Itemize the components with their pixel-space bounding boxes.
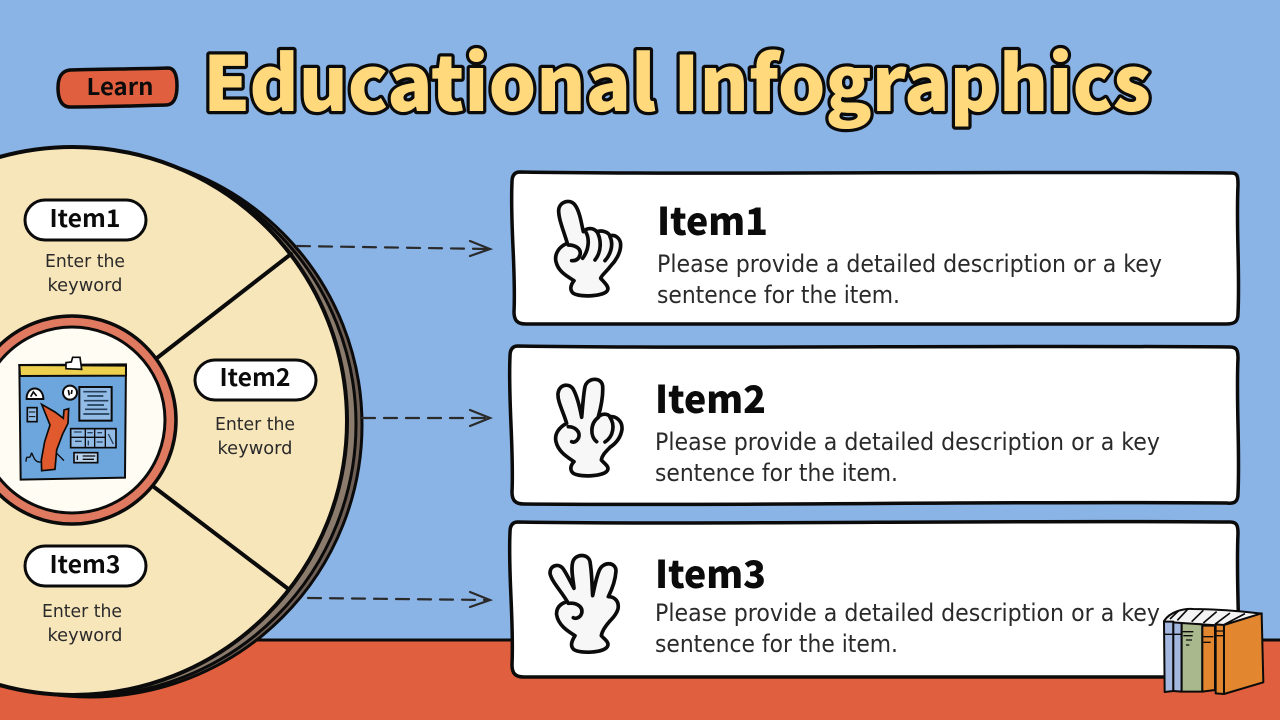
icon: books [1164, 609, 1263, 694]
item 2 description [655, 428, 1160, 487]
title: Educational Infographics [203, 23, 1151, 133]
item 2 description: Please provide a detailed description or a key [655, 428, 1160, 456]
item 1 description: sentence for the item. [657, 281, 900, 309]
arrow: item 2 [362, 410, 490, 426]
icon: three finger hand [550, 555, 618, 652]
ground band [0, 640, 1280, 720]
item 2 heading: Item2 [655, 369, 766, 424]
icon: two finger hand [556, 379, 622, 476]
wheel disc [0, 147, 347, 695]
wheel label: Item3: Item3 [50, 545, 120, 580]
item 3 description [655, 599, 1160, 658]
wheel label: Item3: keyword [48, 625, 122, 646]
wheel label: Item2 [195, 358, 316, 459]
badge: Learn: Learn [86, 68, 154, 102]
panel: wheel [0, 147, 362, 697]
card: item 3 [510, 522, 1239, 678]
wheel label: Item2: Item2 [220, 358, 290, 393]
arrow: item 3 [308, 592, 490, 607]
wheel label: Item1 [25, 199, 146, 296]
item 2 description: sentence for the item. [655, 459, 898, 487]
item 1 description [657, 250, 1162, 309]
card: item 2 [510, 346, 1239, 504]
wheel label: Item1: Item1 [50, 199, 120, 234]
wheel dividers [154, 254, 291, 588]
wheel label: Item2: keyword [218, 438, 292, 459]
wheel label: Item1: Enter the [45, 251, 125, 272]
illustration: fox at a board [19, 357, 126, 480]
arrow: item 1 [297, 241, 490, 256]
wheel label: Item1: keyword [48, 275, 122, 296]
item 1 description: Please provide a detailed description or a key [657, 250, 1162, 278]
wheel shadow layers [0, 152, 362, 697]
item 3 heading: Item3 [655, 544, 766, 599]
wheel label: Item3 [25, 545, 146, 646]
icon: one finger hand [556, 201, 621, 296]
item 1 heading: Item1 [657, 191, 768, 246]
wheel label: Item2: Enter the [215, 414, 295, 435]
card: item 1 [512, 172, 1239, 325]
badge: Learn [58, 68, 177, 107]
item 3 description: sentence for the item. [655, 630, 898, 658]
wheel label: Item3: Enter the [42, 601, 122, 622]
center medallion [0, 316, 176, 524]
item 3 description: Please provide a detailed description or a key [655, 599, 1160, 627]
